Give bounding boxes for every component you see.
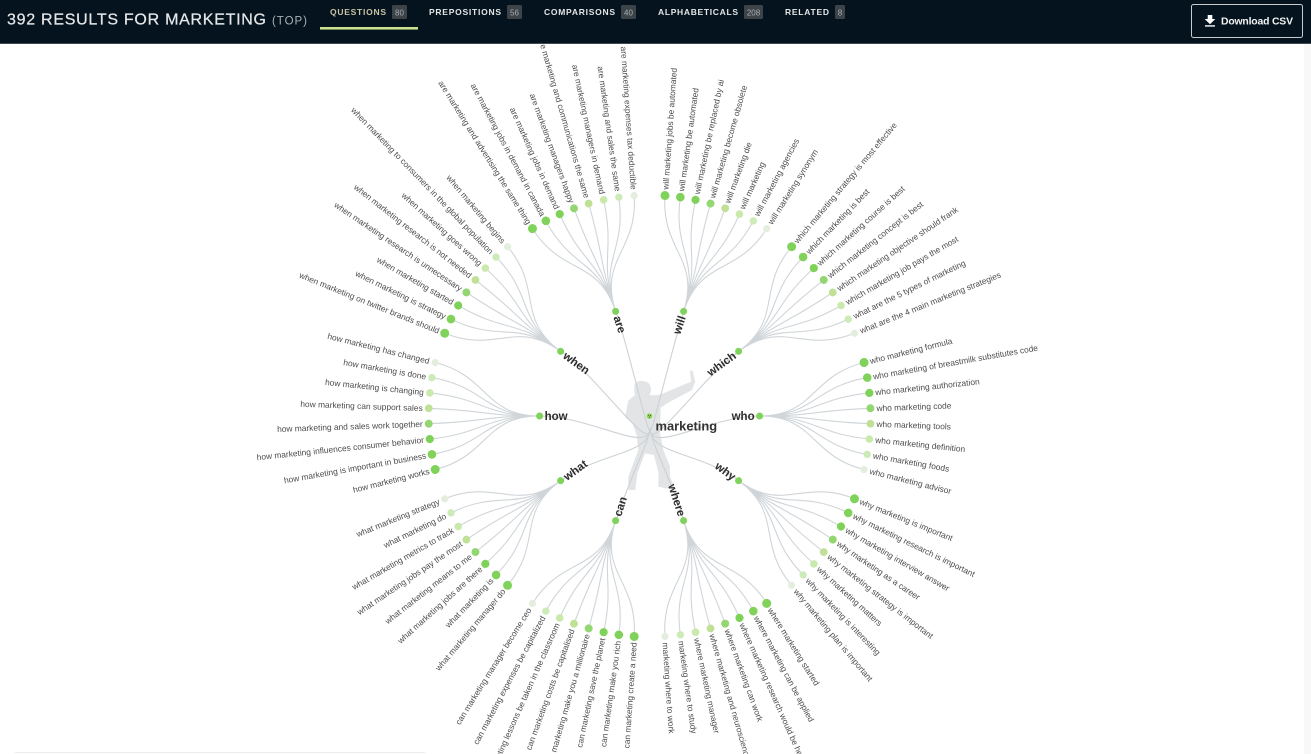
can node and label: can	[612, 495, 630, 518]
leaf: when 6: when marketing goes wrong	[399, 190, 485, 268]
when node and label	[554, 345, 591, 377]
what node and label: what	[561, 458, 590, 484]
tab: alphabeticals: 208	[747, 8, 761, 18]
leaf: why 7: why marketing is interesting	[803, 575, 883, 657]
leaf: which 4: which marketing concept is best	[825, 199, 926, 281]
leaf: which 7: what are the 5 types of marketing	[851, 258, 967, 321]
leaf: which 2: which marketing is best	[803, 186, 872, 257]
leaf: who 5: who marketing tools	[875, 419, 951, 432]
branch links fanning out to leaves	[429, 189, 870, 643]
branch: can	[453, 495, 639, 754]
root links from centre to branches	[540, 311, 760, 521]
leaf: will 6: will marketing	[737, 160, 767, 212]
branch: when	[297, 105, 591, 377]
tab: comparisons: COMPARISONS	[544, 7, 615, 17]
leaf: where 8: marketing where to work	[660, 642, 677, 735]
tab: prepositions	[429, 5, 522, 19]
will node and label: will	[671, 315, 689, 337]
leaf: which 6: which marketing job pays the most	[843, 234, 961, 307]
leaf: are 3: are marketing jobs in demand	[508, 106, 562, 211]
when node and label: when	[560, 350, 591, 377]
leaf: which 1: which marketing strategy is most effective	[791, 120, 899, 246]
download csv button: Download CSV	[1221, 16, 1293, 28]
branch: how	[256, 331, 568, 495]
how node and label: how	[545, 411, 568, 423]
leaf: how 5: how marketing can support sales	[300, 399, 423, 413]
branch: why	[712, 460, 977, 684]
leaf: who 4: who marketing code	[875, 400, 952, 413]
which node and label: which	[704, 350, 739, 380]
leaf: where 7: marketing where to study	[676, 640, 699, 735]
leaf: what 6: what marketing metrics to track	[349, 525, 456, 592]
leaf: how 4: how marketing and sales work together	[277, 419, 423, 434]
leaf: what 3: what marketing jobs are there	[395, 564, 485, 646]
leaf: are 6: are marketing managers in demand	[570, 64, 607, 195]
leaf: can 3: can marketing save the planet	[574, 636, 607, 748]
icon: download	[1205, 15, 1215, 27]
branch: which	[704, 120, 1002, 380]
tab: questions: 80	[395, 8, 404, 18]
leaf: are 7: are marketing and sales the same	[595, 66, 623, 192]
leaf: where 4: where marketing can work	[722, 627, 766, 724]
branch: who	[731, 336, 1039, 496]
leaf: when 3: when marketing started	[374, 254, 456, 307]
can node and label	[610, 495, 630, 526]
leaf: will 8: will marketing synonym	[765, 147, 820, 227]
download csv button	[1192, 4, 1302, 38]
leaf: are 8: are marketing expenses tax deductible	[619, 46, 639, 190]
leaf: can 1: can marketing create a need	[621, 642, 639, 749]
leaf: when 5: when marketing research is not needed	[351, 181, 474, 280]
leaf: where 6: where marketing manager	[692, 636, 722, 734]
leaf: why 2: why marketing research is important	[851, 511, 977, 579]
leaf: what 8: what marketing strategy	[354, 496, 442, 539]
why node and label: why	[712, 460, 738, 484]
where node and label: where	[665, 482, 687, 518]
leaf: why 3: why marketing interview answer	[843, 525, 952, 593]
leaf: which 8: what are the 4 main marketing strategies	[857, 270, 1002, 336]
leaf: when 1: when marketing on twitter brands should	[297, 270, 441, 336]
tab: questions: QUESTIONS	[330, 7, 386, 17]
leaf: will 2: will marketing be automated	[676, 87, 701, 193]
who node and label: who	[731, 411, 755, 423]
leaf: who 3: who marketing authorization	[874, 376, 980, 397]
branch: where	[660, 482, 822, 754]
leaf: how 3: how marketing influences consumer behavior	[256, 435, 425, 462]
tab: alphabeticals	[658, 5, 763, 19]
tab: prepositions: PREPOSITIONS	[429, 7, 501, 17]
leaf: why 8: why marketing plan is important	[791, 586, 875, 684]
leaf: can 7: can marketing expenses be capitalized	[471, 614, 548, 746]
leaf: are 5: are marketing and communications the same	[536, 36, 592, 199]
leaf: what 5: what marketing jobs pay the most	[354, 538, 465, 617]
tab: alphabeticals: ALPHABETICALS	[658, 7, 738, 17]
leaf: why 6: why marketing matters	[814, 564, 884, 628]
tab: prepositions: 56	[510, 8, 519, 18]
centre seed icon	[647, 413, 652, 419]
leaf: which 5: which marketing objective should frank	[834, 204, 961, 294]
leaf: when 8: when marketing begins	[444, 172, 508, 245]
are node and label	[608, 307, 627, 335]
leaf: will 3: will marketing be replaced by ai	[692, 78, 726, 196]
leaf: where 1: where marketing started	[765, 605, 822, 688]
what node and label	[555, 458, 590, 488]
will node and label	[671, 307, 691, 337]
leaf: when 2: when marketing is strategy	[353, 268, 448, 321]
leaf: how 1: how marketing works	[352, 466, 431, 495]
centre keyword: marketing	[656, 418, 717, 434]
top qualifier: (TOP)	[272, 16, 307, 28]
leaf: who 1: who marketing formula	[868, 336, 954, 366]
leaf: will 1: will marketing jobs be automated	[660, 67, 679, 191]
tab: related: RELATED	[785, 7, 829, 17]
leaf: why 4: why marketing as a career	[834, 538, 922, 602]
leaf: are 4: are marketing managers happy	[528, 92, 577, 205]
leaf: why 1: why marketing is important	[857, 496, 955, 543]
leaf: are 2: are marketing jobs in demand in canada	[469, 82, 548, 218]
leaf: will 7: will marketing agencies	[751, 137, 801, 219]
leaf: what 7: what marketing do	[381, 511, 448, 550]
tab: related: 8	[838, 8, 843, 18]
tab: comparisons: 40	[624, 8, 633, 18]
which node and label	[704, 345, 746, 380]
leaf: will 5: will marketing die	[722, 140, 754, 205]
leaf: which 3: which marketing course is best	[814, 183, 907, 268]
leaf: will 4: will marketing become obsolete	[707, 84, 749, 200]
tab: related	[785, 5, 845, 19]
leaf: who 8: who marketing advisor	[868, 466, 953, 496]
header bar	[0, 0, 1311, 44]
branch: will	[660, 67, 820, 337]
branch: are	[436, 36, 639, 335]
leaf: what 2: what marketing is	[442, 576, 496, 630]
branch: what	[349, 458, 590, 673]
leaf: who 6: who marketing definition	[874, 435, 966, 454]
leaf: how 8: how marketing has changed	[326, 331, 431, 366]
leaf: where 2: where marketing can be applied	[751, 613, 816, 724]
leaf: when 4: when marketing research is unnecessary	[332, 199, 465, 294]
leaf: what 4: what marketing means to me	[382, 552, 474, 627]
tab: comparisons	[544, 5, 636, 19]
tab: questions	[320, 5, 418, 30]
leaf: how 7: how marketing is done	[343, 357, 427, 382]
leaf: can 5: can marketing costs be capitalised	[523, 627, 577, 751]
are node and label: are	[610, 315, 627, 335]
silhouette figure behind the centre	[625, 371, 695, 490]
leaf: who 2: who marketing of breastmilk substitutes code	[871, 343, 1039, 382]
leaf: how 2: how marketing is important in business	[283, 450, 427, 485]
leaf: who 7: who marketing foods	[871, 450, 950, 474]
why node and label	[712, 460, 744, 488]
leaf: can 8: can marketing manager become ceo	[453, 606, 534, 726]
results title: 392 RESULTS FOR MARKETING	[7, 12, 266, 28]
leaf: can 2: can marketing make you rich	[598, 640, 623, 748]
leaf: when 7: when marketing to consumers in the global population	[349, 105, 496, 256]
leaf: are 1: are marketing and advertising the same thing	[436, 79, 534, 226]
leaf: why 5: why marketing strategy is important	[825, 551, 936, 641]
leaf: how 6: how marketing is changing	[325, 377, 425, 397]
leaf: what 1: what marketing manager do	[432, 586, 508, 673]
